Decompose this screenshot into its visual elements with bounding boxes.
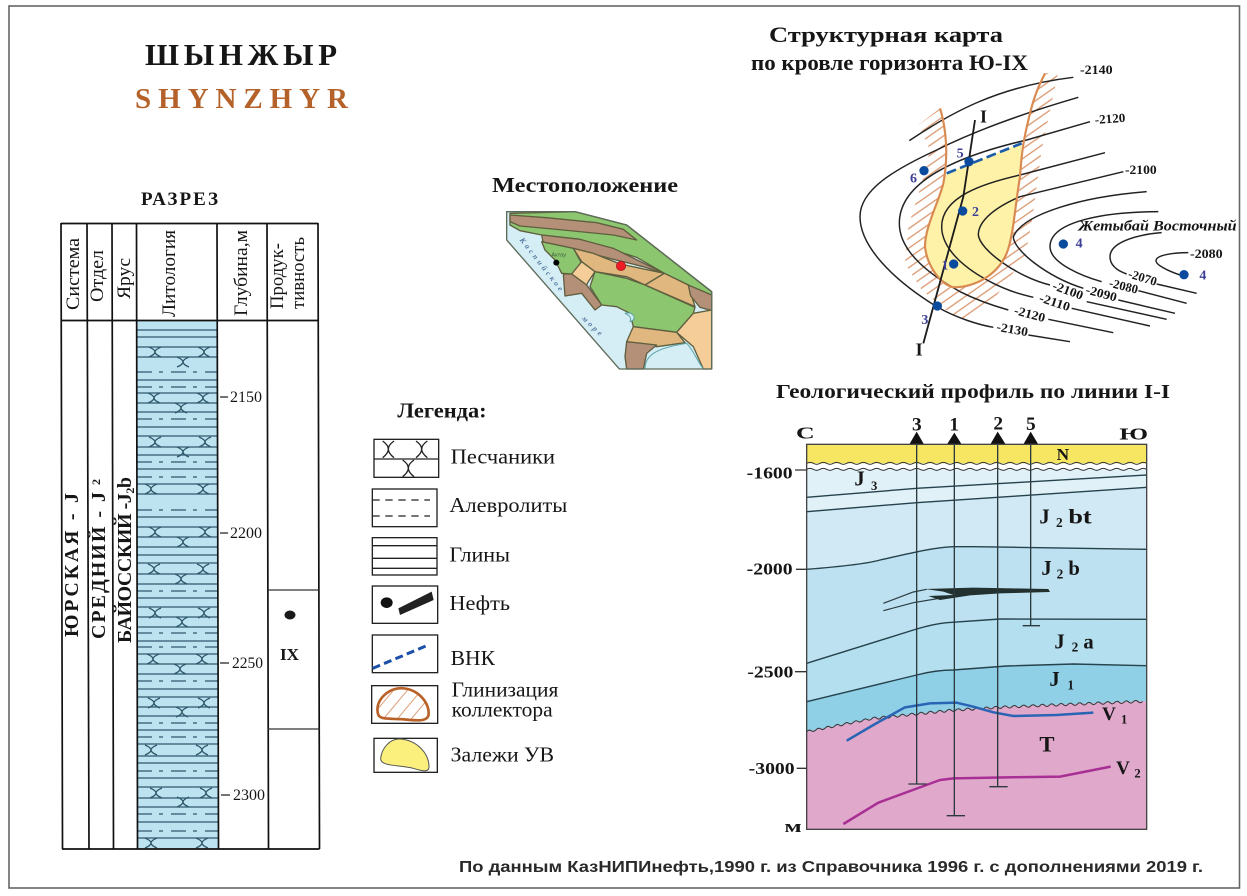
formation labels: J xyxy=(1054,631,1065,653)
contour labels: -2080 xyxy=(1190,247,1223,261)
legend: sandstone xyxy=(374,439,555,477)
stratigraphic column xyxy=(61,223,320,849)
stratigraphic units xyxy=(61,477,137,643)
hydrocarbon pool xyxy=(925,143,1022,287)
heading: structural map: Структурная карта xyxy=(769,22,1003,47)
formation labels: V xyxy=(1102,704,1116,725)
compass labels: С xyxy=(796,424,815,443)
well markers xyxy=(909,432,1038,444)
formation labels: 2 xyxy=(1072,640,1079,655)
oil lens xyxy=(883,588,1050,611)
clay-out boundary xyxy=(925,73,1045,287)
heading: section: РАЗРЕЗ xyxy=(141,189,218,210)
compass labels: Ю xyxy=(1119,424,1148,443)
structure contours xyxy=(860,77,1197,342)
location map xyxy=(507,212,712,369)
formation labels: J xyxy=(854,469,865,491)
depth axis: м xyxy=(784,817,802,836)
formation labels: 2 xyxy=(1134,767,1141,781)
contour labels: -2120 xyxy=(1013,303,1047,325)
legend: reservoir clay-out: коллектора xyxy=(452,700,553,722)
water-oil contact xyxy=(947,143,1022,173)
section line I-I xyxy=(923,120,975,343)
compass labels xyxy=(796,424,1148,443)
contour labels: -2100 xyxy=(1051,279,1085,303)
heading: location: Местоположение xyxy=(492,173,678,197)
profile frame xyxy=(807,444,1147,829)
depth axis: -3000 xyxy=(749,759,795,778)
well numbers xyxy=(910,146,1206,328)
legend: reservoir clay-out xyxy=(372,680,559,723)
formation labels: 1 xyxy=(1067,677,1074,692)
well numbers: 5 xyxy=(957,146,964,161)
formation labels: 3 xyxy=(871,479,877,493)
depth scale: 2150 xyxy=(230,389,262,406)
well numbers: 3 xyxy=(912,415,922,436)
geological profile xyxy=(747,413,1148,836)
well numbers: 3 xyxy=(921,313,928,328)
well numbers: 4 xyxy=(1076,236,1083,251)
formation labels: N xyxy=(1057,445,1070,464)
column headers: Литология xyxy=(159,230,180,317)
title xyxy=(135,37,349,115)
well numbers xyxy=(912,413,1036,436)
heading: structural map xyxy=(751,22,1028,75)
formation labels: 2 xyxy=(1056,515,1063,530)
depth scale: 2300 xyxy=(233,787,265,804)
formation labels: 2 xyxy=(1057,566,1064,581)
contour labels xyxy=(995,63,1223,339)
contour labels: -2090 xyxy=(1084,283,1118,304)
section line labels: I xyxy=(980,107,987,127)
legend: siltstone xyxy=(372,489,567,527)
contour labels: -2100 xyxy=(1125,163,1157,177)
seismic horizons xyxy=(843,703,1111,824)
stratigraphic units: БАЙОССКИЙ -J xyxy=(114,493,136,643)
column headers: Система xyxy=(63,237,84,310)
contour labels: -2130 xyxy=(995,320,1029,339)
column headers: Продук- xyxy=(267,243,288,309)
formation labels: J xyxy=(1041,558,1052,580)
section line labels: I xyxy=(916,339,923,359)
well numbers: 4 xyxy=(1199,268,1206,283)
contour labels: -2120 xyxy=(1094,111,1126,127)
clay-out hatching xyxy=(905,72,1058,320)
well numbers: 6 xyxy=(910,172,917,187)
column headers: Глубина,м xyxy=(231,230,252,316)
section line labels xyxy=(916,107,987,359)
wells xyxy=(919,157,1189,311)
unconformities xyxy=(807,462,1147,732)
legend xyxy=(372,400,567,772)
column headers: Ярус xyxy=(114,258,135,299)
legend: hydrocarbon pool: Залежи УВ xyxy=(451,743,554,767)
column headers xyxy=(63,230,309,317)
productivity interval: IX xyxy=(280,645,300,664)
well bores xyxy=(908,444,1040,816)
contour labels: -2080 xyxy=(1108,276,1139,297)
stratigraphic units: ЮРСКАЯ - J xyxy=(61,493,83,637)
well numbers: 1 xyxy=(941,259,948,274)
depth scale xyxy=(220,389,265,804)
contour labels: -2070 xyxy=(1126,267,1159,289)
legend: sandstone: Песчаники xyxy=(451,444,555,468)
formation labels: V xyxy=(1116,758,1130,779)
well numbers: 2 xyxy=(993,413,1003,434)
column headers: тивность xyxy=(288,237,309,309)
formation labels: T xyxy=(1039,731,1054,756)
stratigraphic units: b xyxy=(114,477,136,488)
location map: Актау xyxy=(551,253,566,259)
legend: oil: Нефть xyxy=(449,591,510,615)
depth axis xyxy=(747,463,807,836)
location map: море xyxy=(580,313,605,338)
stratigraphic units: 2 xyxy=(89,479,103,490)
productivity interval xyxy=(268,590,320,729)
well numbers: 5 xyxy=(1026,414,1036,435)
formation labels: J xyxy=(1039,507,1050,529)
contour labels: -2140 xyxy=(1080,63,1113,77)
depth axis: -2000 xyxy=(747,559,793,578)
lithology column fill xyxy=(137,321,219,849)
legend: clay xyxy=(372,538,510,575)
formation labels: bt xyxy=(1068,507,1092,529)
column headers: Отдел xyxy=(87,249,108,302)
table grid xyxy=(61,223,320,849)
formation labels: a xyxy=(1083,631,1094,653)
heading: geological profile: Геологический профиль по линии I-I xyxy=(776,381,1170,403)
formation labels xyxy=(854,445,1141,781)
neighbouring field label: Жетыбай Восточный xyxy=(1077,218,1237,234)
depth axis: -1600 xyxy=(747,463,793,482)
legend: hydrocarbon pool xyxy=(374,738,554,772)
title: SHYNZHYR xyxy=(135,83,349,115)
formation labels: b xyxy=(1068,558,1080,580)
depth scale: 2200 xyxy=(230,525,262,542)
formation labels: 1 xyxy=(1121,713,1127,727)
formation labels: J xyxy=(1049,669,1060,691)
legend: siltstone: Алевролиты xyxy=(449,493,567,517)
legend: water-oil contact: ВНК xyxy=(451,646,496,670)
title: ШЫНЖЫР xyxy=(145,37,337,72)
well numbers: 1 xyxy=(949,415,959,436)
stratigraphic units: СРЕДНИЙ - J xyxy=(88,492,110,639)
depth axis: -2500 xyxy=(747,662,793,681)
legend heading: Легенда: xyxy=(397,400,487,422)
strata boundaries xyxy=(807,475,1147,702)
legend: clay: Глины xyxy=(449,543,510,567)
legend: oil xyxy=(372,586,510,623)
location map: Каспийское xyxy=(517,235,565,293)
well numbers: 2 xyxy=(972,205,979,220)
stratigraphic units: 2 xyxy=(123,488,137,494)
source note: По данным КазНИПИнефть,1990 г. из Справочника 1996 г. с дополнениями 2019 г. xyxy=(459,859,1203,876)
strata fills xyxy=(807,444,1147,829)
legend: reservoir clay-out: Глинизация xyxy=(452,680,559,702)
heading: structural map: по кровле горизонта Ю-IX xyxy=(751,50,1028,75)
contour labels: -2110 xyxy=(1037,291,1072,314)
depth scale: 2250 xyxy=(232,655,263,672)
lithology pattern xyxy=(137,330,218,848)
structural map xyxy=(860,63,1237,359)
legend: water-oil contact xyxy=(372,635,496,673)
